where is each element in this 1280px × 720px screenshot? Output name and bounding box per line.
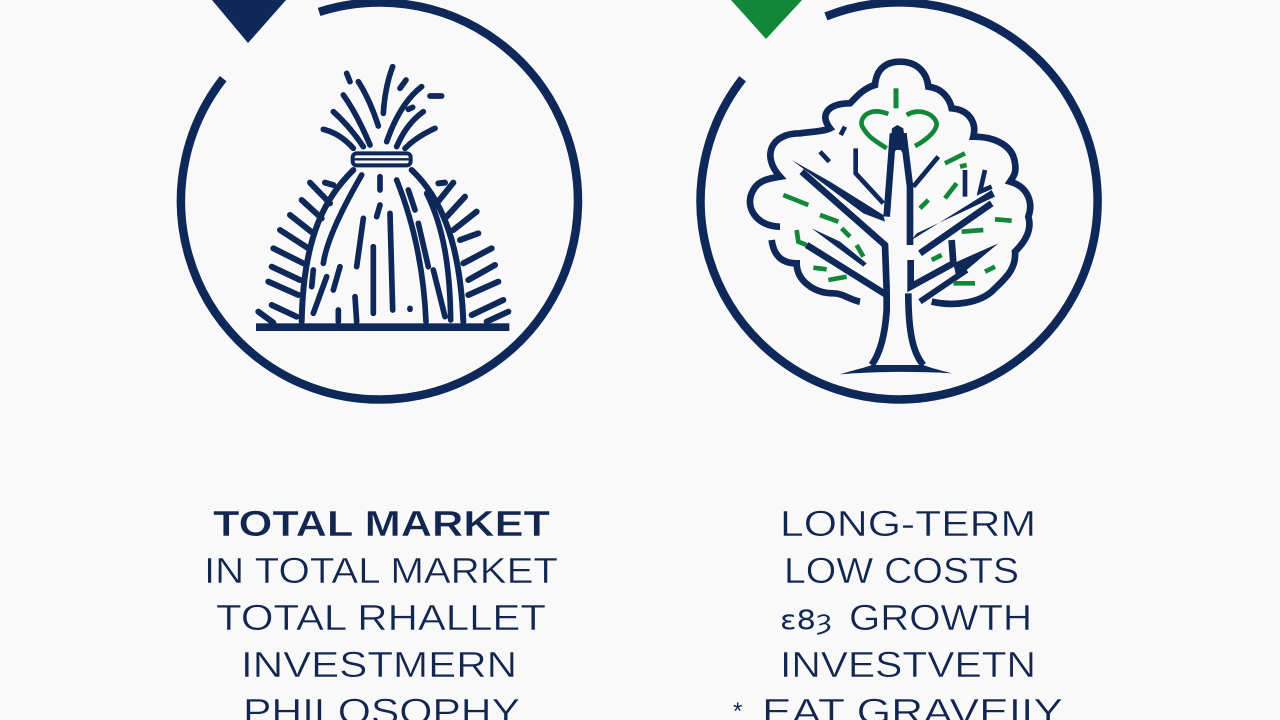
icon: navy triangle marker xyxy=(212,0,286,43)
text block: long-term list xyxy=(733,503,1063,720)
text block: long-term list: LOW COSTS xyxy=(784,550,1019,591)
text block: long-term list: INVESTVETN xyxy=(780,644,1036,685)
panel: total market xyxy=(181,0,578,720)
icon ring: long-term xyxy=(701,2,1098,399)
text block: total market list xyxy=(204,503,558,720)
icon: wheat sheaf xyxy=(256,67,509,331)
text block: total market list: INVESTMERN xyxy=(241,644,517,685)
text block: total market list: TOTAL RHALLET xyxy=(216,597,546,638)
text block: long-term list: ε8ȝ xyxy=(780,605,832,636)
icon ring: total market xyxy=(181,2,578,399)
icon: green triangle marker xyxy=(731,0,802,39)
icon: tree xyxy=(750,62,1030,374)
text block: total market list: TOTAL MARKET xyxy=(213,503,550,544)
text block: total market list: IN TOTAL MARKET xyxy=(204,550,558,591)
text block: long-term list: GROWTH xyxy=(849,597,1032,638)
text block: long-term list: LONG-TERM xyxy=(780,503,1036,544)
panel: long-term xyxy=(701,0,1098,720)
